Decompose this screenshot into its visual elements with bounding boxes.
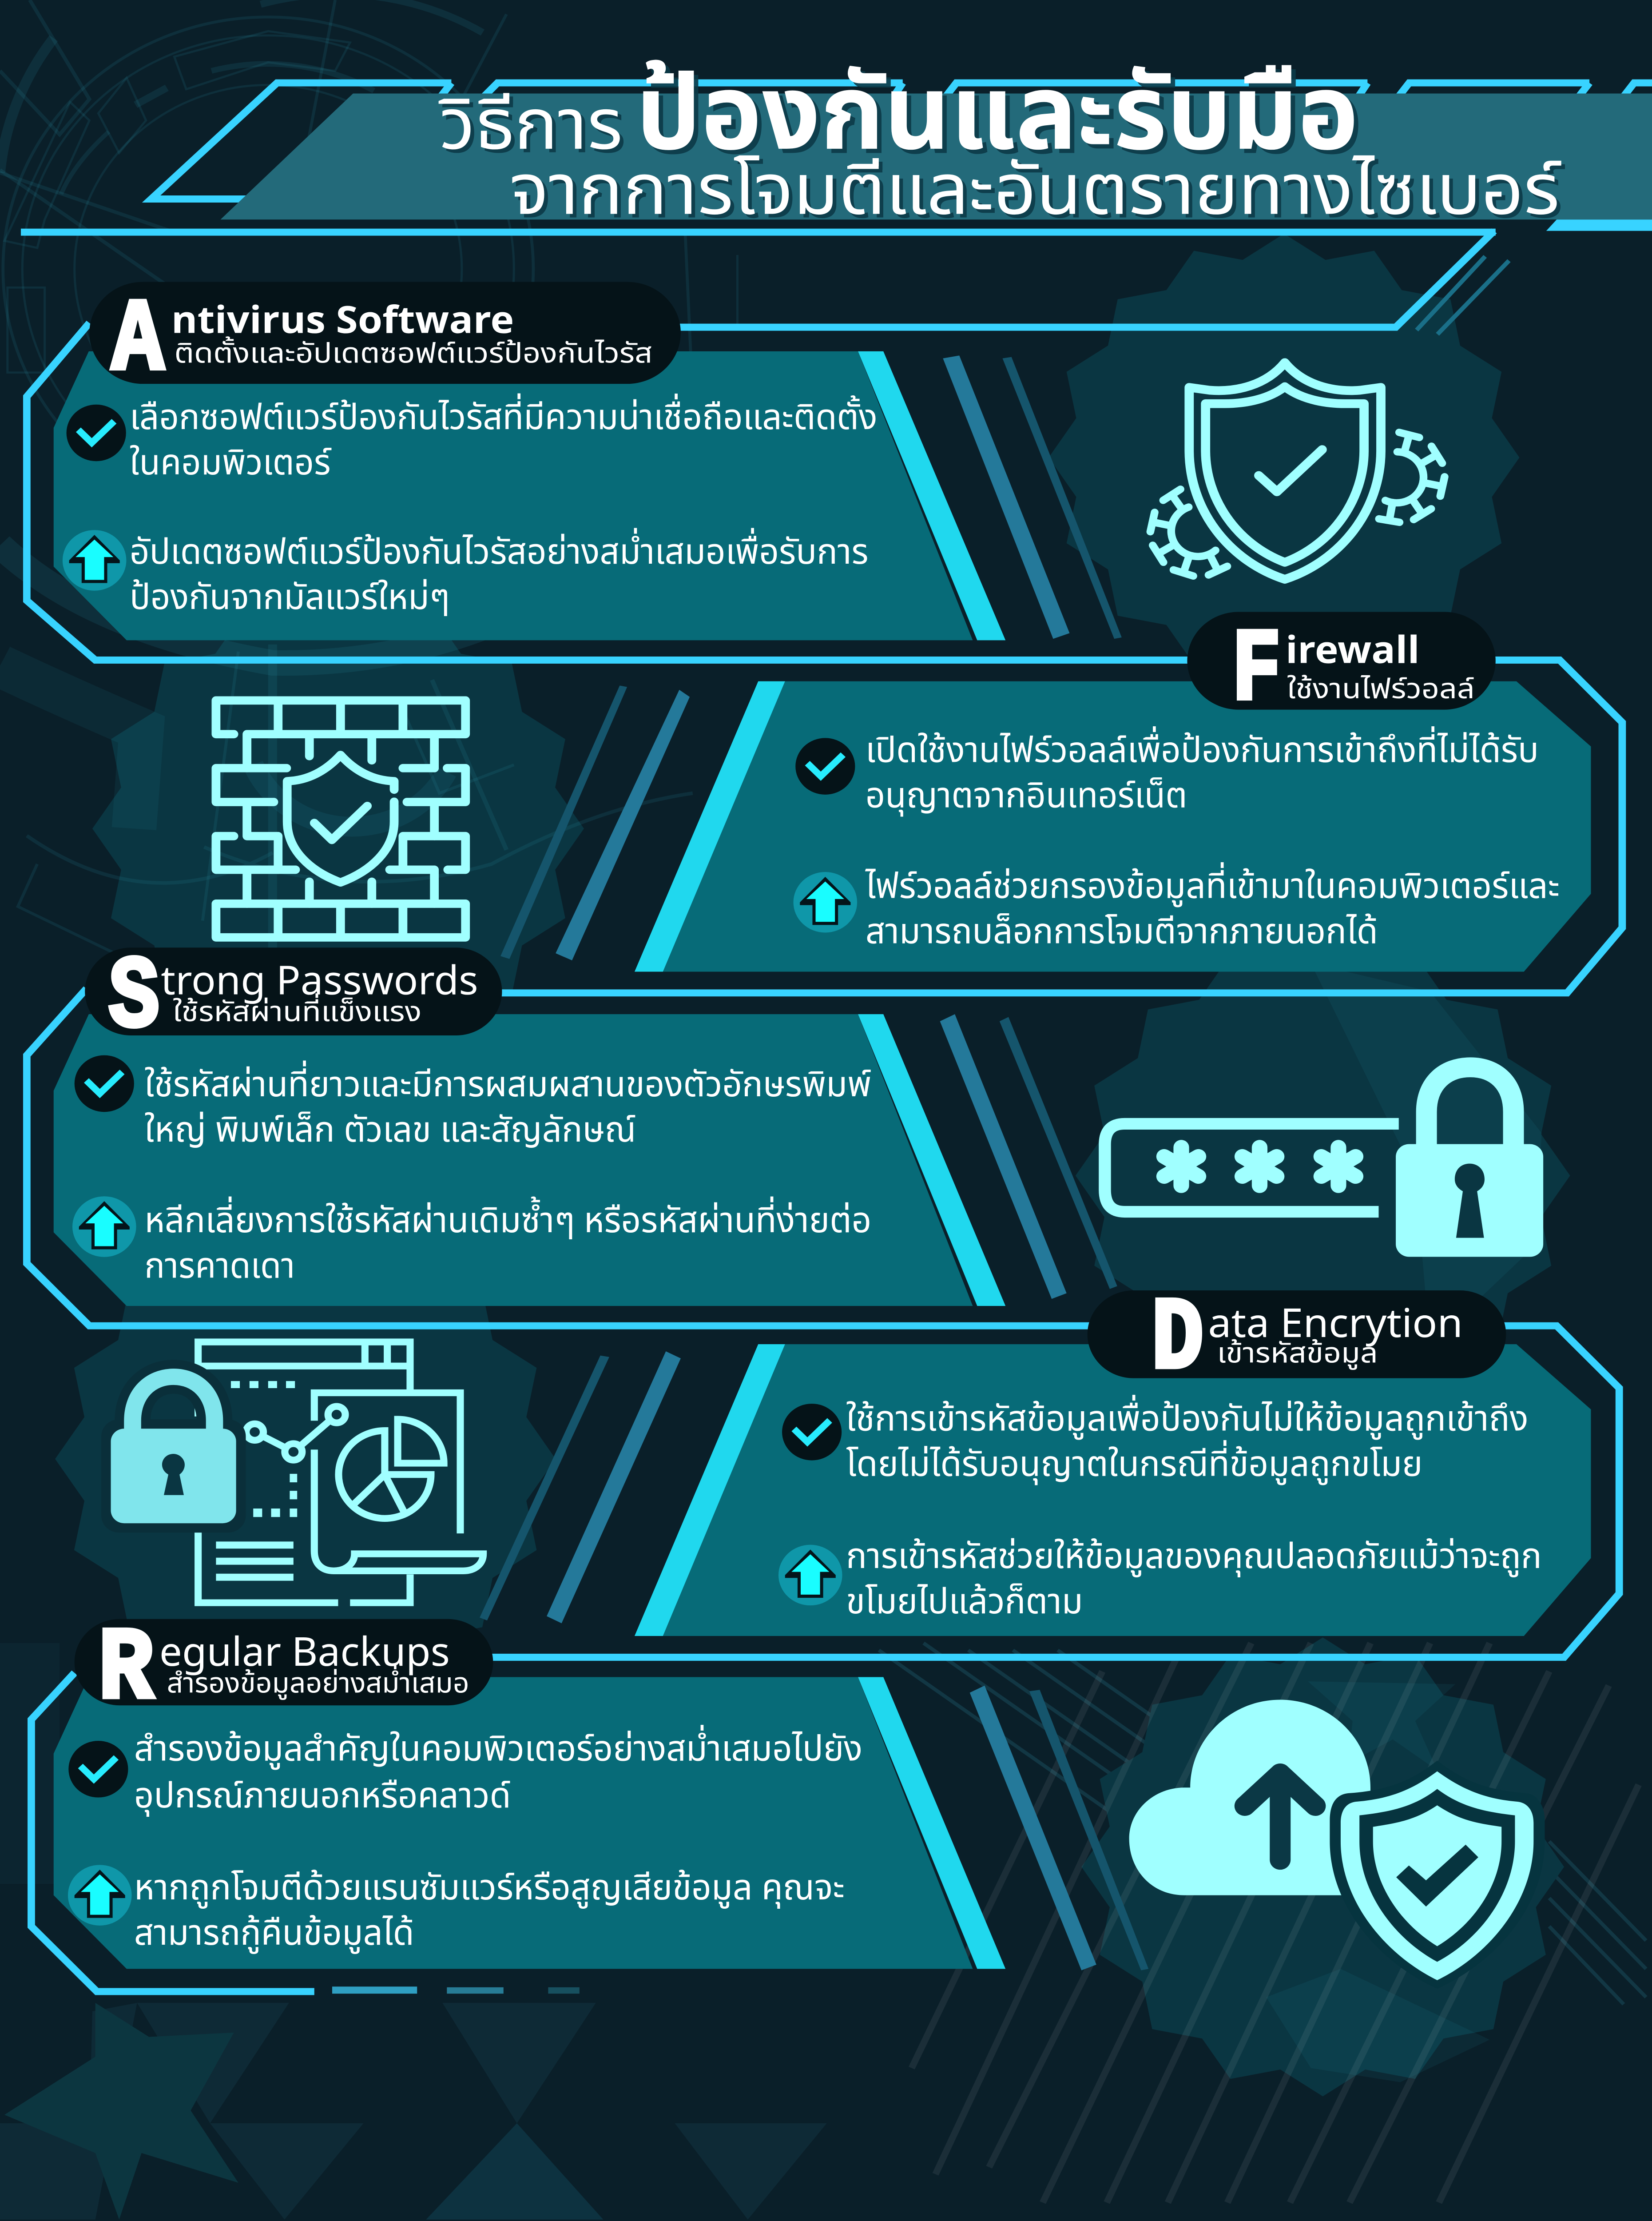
network nodes	[246, 1406, 345, 1460]
header rule	[21, 219, 1652, 334]
padlock	[101, 1377, 246, 1532]
panel 5 text 1	[134, 1723, 862, 1823]
panel 2 border	[477, 660, 1622, 993]
panel 2 body	[635, 681, 1591, 972]
panel 3 text 1: ใหญ่ พิมพ์เล็ก ตัวเลข และสัญลักษณ์	[144, 1104, 636, 1158]
panel 3 text 1: ใช้รหัสผ่านที่ยาวและมีการผสมผสานของตัวอักษรพิมพ์	[144, 1059, 871, 1112]
panel 3 pill: trong Passwords	[161, 953, 478, 1012]
pie chart	[338, 1419, 444, 1518]
cloud	[1129, 1700, 1370, 1895]
panel 3 text 2: การคาดเดา	[144, 1240, 295, 1294]
panel 2 text 1: อนุญาตจากอินเทอร์เน็ต	[866, 770, 1187, 824]
panel 1 stripes	[943, 355, 1122, 639]
document lines	[198, 1342, 483, 1603]
panel 1 text 1: ในคอมพิวเตอร์	[130, 437, 332, 490]
seal: encryption	[55, 1221, 556, 1697]
panel 4 text 1: โดยไม่ได้รับอนุญาตในกรณีที่ข้อมูลถูกขโมย	[846, 1438, 1422, 1492]
panel 4 text 2: ขโมยไปแล้วก็ตาม	[846, 1576, 1083, 1629]
panel 5 text 2	[134, 1862, 845, 1961]
icon: virus left	[1150, 489, 1227, 576]
title line 1 shadow: ป้องกันและรับมือ	[640, 42, 1363, 200]
panel 3 text 2: หลีกเลี่ยงการใช้รหัสผ่านเดิมซ้ำๆ หรือรหัสผ่านที่ง่ายต่อ	[144, 1194, 871, 1248]
panel 3 pill	[85, 941, 502, 1056]
title line 1 bold: ป้องกันและรับมือ	[636, 37, 1358, 196]
panel 5 pill: R	[98, 1612, 154, 1727]
panel 5 body	[54, 1677, 973, 1969]
panel 3: strong passwords	[27, 941, 1117, 1326]
panel 2 text 2	[865, 860, 1560, 959]
panel 2 text 2: ไฟร์วอลล์ช่วยกรองข้อมูลที่เข้ามาในคอมพิวเตอร์และ	[865, 860, 1560, 914]
background: hatch bottom right	[879, 1643, 1646, 2004]
panel 5 pill: egular Backups	[159, 1624, 450, 1684]
panel 4 pill	[1088, 1282, 1506, 1397]
panel 4 pill: เข้ารหัสข้อมูล	[1217, 1333, 1378, 1375]
panel 2 text 1	[866, 724, 1539, 824]
icon: brick wall with shield	[216, 701, 465, 937]
panel 5 stripes	[970, 1686, 1148, 1970]
panel 1 pill: A	[112, 283, 164, 399]
panel 1 pill: ntivirus Software	[171, 294, 514, 350]
panel 5 accent bar	[858, 1677, 1005, 1969]
panel 3 stripes	[940, 1014, 1117, 1299]
panel 2 check	[795, 738, 855, 795]
panel 3 body	[54, 1014, 973, 1306]
title band	[220, 93, 1652, 219]
panel 4 arrow	[778, 1545, 842, 1605]
upload arrow	[1245, 1773, 1315, 1860]
panel 1 border	[27, 231, 1494, 660]
panel 1 pill	[89, 282, 681, 399]
panel 5 pill	[75, 1612, 493, 1727]
title	[438, 37, 1565, 250]
panel 3 pill: S	[109, 941, 159, 1056]
panel 4 pill: D	[1152, 1282, 1203, 1397]
icon: virus right	[1379, 432, 1445, 522]
seal: firewall	[92, 595, 584, 1063]
panel 1 arrow	[63, 530, 126, 591]
panel 4 body	[635, 1344, 1591, 1636]
panel 5 arrow	[68, 1865, 132, 1926]
title line 1 prefix: วิธีการ	[438, 73, 623, 181]
panel 4 text 1: ใช้การเข้ารหัสข้อมูลเพื่อป้องกันไม่ให้ข้อมูลถูกเข้าถึง	[846, 1393, 1529, 1447]
panel 5 text 2: หากถูกโจมตีด้วยแรนซัมแวร์หรือสูญเสียข้อมูล คุณจะ	[134, 1862, 845, 1915]
icon: password and padlock	[1105, 1067, 1543, 1257]
panel 2 pill: ใช้งานไฟร์วอลล์	[1287, 669, 1475, 711]
panel 4 text 1	[846, 1393, 1529, 1492]
panel 4 check	[782, 1404, 842, 1461]
title line 1 shadow: จากการโจมตีและอันตรายทางไซเบอร์	[513, 142, 1565, 250]
panel 5 border	[31, 1673, 314, 1991]
dotted squares and text bars	[216, 1381, 297, 1581]
asterisks	[1164, 1147, 1355, 1186]
panel 4 accent bar	[635, 1344, 785, 1636]
panel 5 text 1: อุปกรณ์ภายนอกหรือคลาวด์	[134, 1770, 511, 1823]
title line 2: จากการโจมตีและอันตรายทางไซเบอร์	[509, 139, 1561, 246]
shield	[1330, 1761, 1545, 1989]
panel 1 text 1: เลือกซอฟต์แวร์ป้องกันไวรัสที่มีความน่าเชื่อถือและติดตั้ง	[130, 391, 878, 445]
background: circuit pattern top-left	[0, 0, 1013, 521]
padlock	[1396, 1067, 1543, 1257]
panel 5 dashes	[332, 1986, 580, 1994]
panel 2 pill: irewall	[1286, 624, 1420, 680]
background: star bottom-left	[4, 2003, 238, 2220]
panel 1: antivirus	[27, 231, 1494, 660]
panel 3 accent bar	[858, 1014, 1005, 1306]
panel 5: regular backups	[31, 1612, 1148, 1994]
background: faceted light overlays on seals	[1266, 963, 1542, 2082]
panel 4 border	[477, 1326, 1619, 1657]
panel 4 stripes	[480, 1351, 681, 1623]
background: long slanted lines	[912, 1643, 1639, 2203]
panel 3 check	[75, 1055, 134, 1112]
panel 4 pill: ata Encrytion	[1208, 1296, 1463, 1355]
panel 1 check	[67, 405, 126, 461]
panel 1 text 2: อัปเดตซอฟต์แวร์ป้องกันไวรัสอย่างสม่ำเสมอเพื่อรับการ	[130, 526, 869, 580]
panel 3 arrow	[72, 1196, 136, 1257]
title line 1 shadow: วิธีการ	[442, 77, 627, 184]
panel 1 text 1	[130, 391, 878, 490]
seal: backups	[1081, 1637, 1564, 2096]
panel 2 pill	[1187, 612, 1496, 729]
panel 5 text 2: สามารถกู้คืนข้อมูลได้	[134, 1907, 414, 1961]
icon: shield with viruses	[1150, 362, 1445, 579]
title frame outline	[151, 83, 1652, 199]
background: concentric rings left-middle	[0, 545, 693, 999]
panel 2: firewall	[477, 612, 1622, 993]
panel 4 text 2	[846, 1530, 1542, 1629]
panel 2 arrow	[794, 872, 857, 932]
panel 4 text 2: การเข้ารหัสช่วยให้ข้อมูลของคุณปลอดภัยแม้ว่าจะถูก	[846, 1530, 1542, 1584]
panel 1 body	[54, 351, 973, 640]
seal: antivirus	[1048, 234, 1519, 681]
panel 5 check	[68, 1741, 128, 1798]
panel 4: data encryption	[477, 1282, 1619, 1657]
panel 1 text 2	[130, 526, 869, 625]
panel 2 text 1: เปิดใช้งานไฟร์วอลล์เพื่อป้องกันการเข้าถึงที่ไม่ได้รับ	[866, 724, 1539, 778]
panel 2 text 2: สามารถบล็อกการโจมตีจากภายนอกได้	[866, 906, 1378, 959]
title line 1 shadow	[442, 42, 1565, 250]
panel 5 text 1: สำรองข้อมูลสำคัญในคอมพิวเตอร์อย่างสม่ำเสมอไปยัง	[134, 1723, 862, 1777]
background: triangle pattern bottom	[0, 1643, 827, 2220]
icon: padlock with document and chart	[101, 1342, 483, 1603]
icon: cloud upload with shield	[1129, 1700, 1545, 1989]
password field	[1105, 1124, 1399, 1212]
panel 2 stripes	[500, 685, 690, 960]
panel 3 text 1	[144, 1059, 871, 1158]
panel 2 pill: F	[1232, 613, 1281, 729]
panel 5 pill: สำรองข้อมูลอย่างสม่ำเสมอ	[167, 1663, 469, 1705]
seal: passwords	[1076, 940, 1570, 1411]
panel 1 pill: ติดตั้งและอัปเดตซอฟต์แวร์ป้องกันไวรัส	[174, 333, 652, 375]
panel 3 border	[27, 989, 1110, 1326]
panel 3 pill: ใช้รหัสผ่านที่แข็งแรง	[173, 992, 421, 1034]
panel 1 text 2: ป้องกันจากมัลแวร์ใหม่ๆ	[130, 571, 450, 625]
panel 2 accent bar	[635, 681, 785, 972]
panel 3 text 2	[144, 1194, 871, 1294]
panel 1 accent bar	[858, 351, 1005, 640]
